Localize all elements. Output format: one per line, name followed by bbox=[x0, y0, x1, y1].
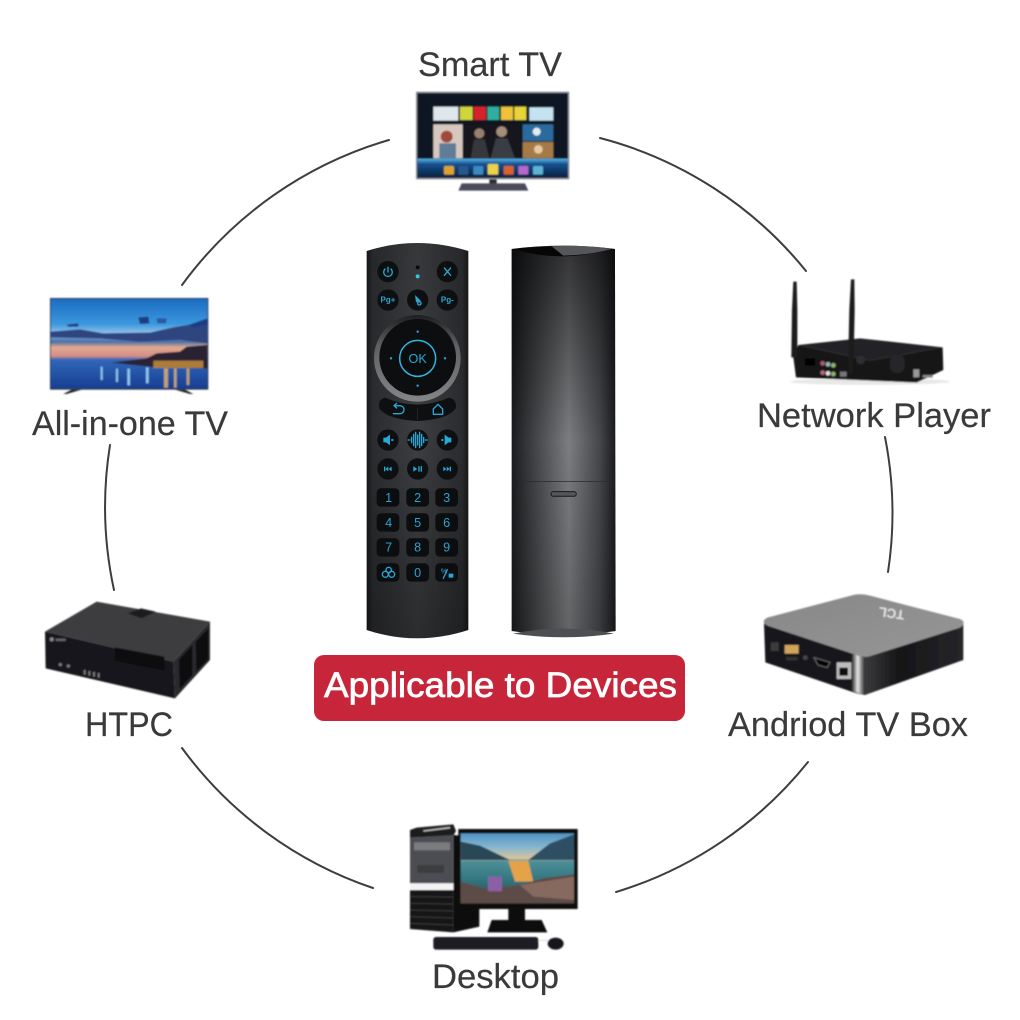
remote: front bbox=[367, 243, 468, 638]
label: Network Player: Network Player bbox=[757, 397, 991, 435]
icon: HTPC bbox=[45, 602, 210, 698]
icon: Android TV Box: TCL bbox=[878, 604, 905, 623]
number keys: 9 bbox=[443, 541, 450, 555]
top cap bbox=[513, 246, 613, 256]
page and cursor keys: Pg- bbox=[441, 296, 454, 305]
label: Smart TV: Smart TV bbox=[418, 46, 562, 84]
power icon bbox=[384, 267, 392, 276]
page and cursor keys: Pg+ bbox=[381, 296, 396, 305]
number keys: 4 bbox=[385, 516, 392, 530]
icon: Desktop bbox=[410, 824, 578, 950]
tower bbox=[410, 824, 479, 932]
D-pad bbox=[374, 315, 461, 402]
bottom cap bbox=[513, 628, 614, 637]
number keys: 0 bbox=[414, 566, 421, 580]
number keys: 2 bbox=[414, 491, 421, 505]
label: Desktop: Desktop bbox=[432, 958, 559, 996]
media keys bbox=[384, 466, 451, 472]
back and home keys bbox=[379, 398, 456, 421]
label: All-in-one TV: All-in-one TV bbox=[32, 405, 228, 443]
number keys: 3 bbox=[443, 491, 450, 505]
page and cursor keys bbox=[381, 295, 454, 305]
top buttons bbox=[377, 261, 458, 480]
number keys bbox=[377, 488, 458, 582]
mute icon bbox=[444, 268, 451, 275]
number keys: 1 bbox=[385, 491, 392, 505]
banner: Applicable to Devices: Applicable to Devices bbox=[324, 666, 677, 705]
D-pad: OK bbox=[409, 352, 427, 366]
icon: Smart TV bbox=[416, 92, 569, 191]
number keys: % bbox=[441, 567, 448, 576]
monitor bbox=[458, 829, 578, 909]
number keys: 7 bbox=[385, 541, 392, 555]
ring of connecting arcs bbox=[105, 138, 892, 892]
label: Andriod TV Box: Andriod TV Box bbox=[728, 706, 968, 744]
battery latch bbox=[551, 492, 576, 496]
remote: back bbox=[512, 246, 616, 637]
number keys: 6 bbox=[443, 516, 450, 530]
label: HTPC: HTPC bbox=[85, 706, 173, 744]
icon: All-in-one TV bbox=[50, 298, 208, 394]
number keys: 8 bbox=[414, 541, 421, 555]
battery seam bbox=[518, 481, 610, 483]
volume and voice keys bbox=[383, 432, 451, 448]
number keys: 5 bbox=[414, 516, 421, 530]
mic and LED bbox=[416, 265, 420, 278]
icon: Network Player bbox=[790, 279, 950, 385]
banner: Applicable to Devices bbox=[314, 655, 685, 721]
icon: Android TV Box bbox=[764, 594, 964, 695]
